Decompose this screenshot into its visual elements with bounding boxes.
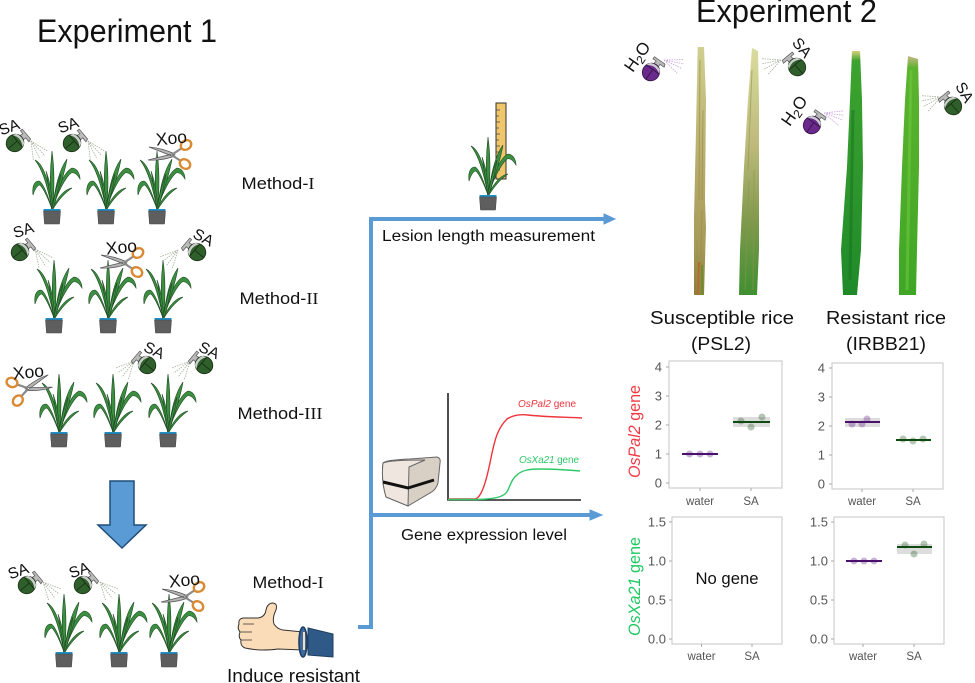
photo: rice leaf H2O resistant: [841, 51, 863, 295]
chart: OsXa21 resistant: 1.5: [810, 514, 828, 530]
chart: OsXa21 susceptible, no gene: water: [686, 651, 716, 663]
row: Method-III plants: SA: [141, 339, 167, 363]
row: selected Method-I plants: Xoo: [168, 568, 201, 592]
icon: qPCR machine: [382, 457, 440, 506]
heading: Resistant rice: (IRBB21): [846, 334, 926, 354]
chart: amplification curves: OsXa21 gene: [519, 455, 579, 466]
label: Method-III: Method- III: [238, 404, 323, 423]
chart: OsPal2 susceptible: [655, 360, 782, 508]
arrow: big blue down arrow: [98, 481, 146, 548]
chart: OsPal2 susceptible: 4: [655, 360, 662, 374]
heading: Susceptible rice: Susceptible rice: [650, 308, 794, 328]
photo: rice leaf SA susceptible: [739, 48, 759, 295]
chart: OsPal2 susceptible: 1: [655, 446, 662, 462]
label: Lesion length measurement: Lesion length measurement: [382, 228, 596, 245]
icon: H2O sprayer 2: [777, 92, 845, 137]
row: Method-III plants: SA: [196, 339, 222, 363]
chart: OsPal2 resistant: [818, 360, 943, 508]
chart: OsPal2 resistant: 1: [818, 448, 825, 462]
icon: plant with ruler: [469, 103, 516, 210]
chart: OsXa21 susceptible, no gene: SA: [744, 651, 760, 663]
photo: rice leaf SA resistant: [899, 56, 919, 295]
label: Method-I: Method- I: [242, 174, 315, 193]
chart: OsPal2 resistant: 0: [818, 476, 825, 492]
chart: amplification curves: OsPal2 gene: [518, 399, 576, 410]
icon: H2O sprayer 2: O: [788, 92, 812, 114]
chart: OsXa21 susceptible, no gene: [648, 514, 782, 663]
icon: thumbs up: [238, 603, 333, 657]
icon: H2O sprayer 1: O: [631, 38, 655, 60]
icon: SA sprayer 1: SA: [788, 35, 815, 62]
chart: OsXa21 susceptible, no gene: 0.0: [648, 632, 666, 646]
y label: OsXa21 gene: OsXa21 gene: [625, 537, 644, 636]
y label: OsPal2 gene: OsPal2 gene: [625, 385, 644, 478]
arrows: blue connector: [358, 214, 615, 627]
icon: H2O sprayer 1: H: [620, 55, 643, 75]
chart: OsPal2 susceptible: 3: [655, 388, 662, 404]
chart: OsXa21 resistant: water: [848, 651, 877, 663]
chart: OsPal2 susceptible: 2: [655, 418, 662, 432]
chart: amplification curves: [448, 393, 582, 500]
chart: OsXa21 resistant: [810, 514, 944, 663]
icon: H2O sprayer 1: 2: [633, 53, 649, 67]
heading: Susceptible rice: [650, 308, 794, 354]
chart: OsXa21 resistant: 0.0: [810, 632, 828, 646]
row: Method-II plants: SA: [11, 219, 37, 242]
label: Method-II: Method- II: [240, 289, 319, 308]
row: Method-II plants: SA: [190, 226, 217, 251]
icon: H2O sprayer 2: 2: [790, 107, 806, 121]
chart: OsXa21 resistant: 0.5: [810, 592, 828, 608]
chart: OsPal2 resistant: water: [847, 496, 876, 508]
chart: OsPal2 susceptible: SA: [743, 496, 759, 508]
row: Method-I plants: [0, 114, 193, 224]
chart: OsXa21 susceptible, no gene: 1.5: [648, 514, 666, 530]
label: selected Method-I: Method-I: [252, 573, 324, 592]
row: Method-I plants: SA: [56, 114, 82, 137]
chart: OsPal2 resistant: 3: [818, 390, 825, 404]
icon: H2O sprayer 2: H: [777, 109, 800, 129]
chart: OsPal2 susceptible: 0: [655, 476, 662, 490]
heading: Resistant rice: Resistant rice: [826, 308, 946, 328]
row: Method-II plants: [8, 219, 217, 333]
chart: OsPal2 resistant: 2: [818, 418, 825, 434]
row: Method-I plants: Xoo: [155, 126, 188, 150]
chart: OsXa21 susceptible, no gene: 0.5: [648, 592, 666, 608]
chart: OsPal2 resistant: 4: [818, 360, 825, 376]
icon: H2O sprayer 1: [620, 38, 685, 84]
row: selected Method-I plants: [6, 559, 206, 667]
title: Experiment 1: Experiment 1: [37, 13, 217, 49]
heading: Susceptible rice: (PSL2): [691, 334, 751, 354]
chart: OsXa21 susceptible, no gene: No gene: [696, 570, 758, 588]
chart: OsXa21 resistant: SA: [906, 651, 922, 663]
label: Gene expression level: Gene expression level: [401, 527, 567, 544]
chart: OsPal2 susceptible: water: [685, 496, 714, 508]
row: selected Method-I plants: SA: [6, 560, 32, 583]
row: Method-III plants: [3, 339, 222, 447]
chart: OsXa21 susceptible, no gene: 1.0: [648, 554, 666, 568]
photo: rice leaf H2O susceptible: [694, 47, 706, 295]
heading: Resistant rice: [826, 308, 946, 354]
icon: SA sprayer 2: [919, 80, 975, 118]
chart: OsPal2 resistant: SA: [905, 496, 921, 508]
row: selected Method-I plants: SA: [67, 559, 93, 582]
row: Method-III plants: Xoo: [12, 360, 45, 384]
icon: SA sprayer 1: [759, 35, 815, 79]
chart: OsXa21 resistant: 1.0: [810, 554, 828, 568]
row: Method-II plants: Xoo: [105, 235, 138, 259]
